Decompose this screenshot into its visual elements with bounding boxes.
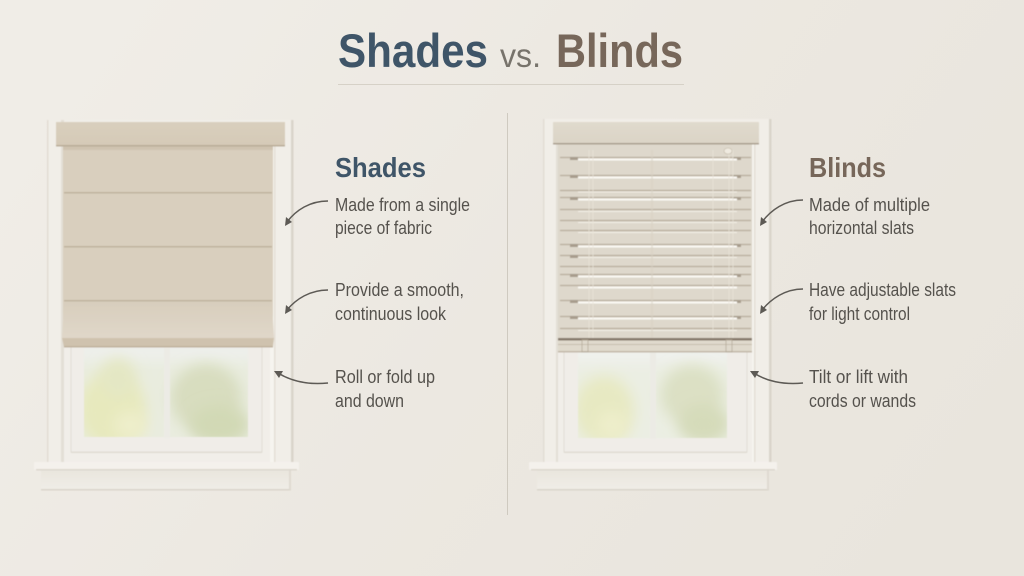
blinds bottom rail xyxy=(558,338,752,352)
window casing xyxy=(47,120,294,464)
callout: roll or fold: and down xyxy=(335,391,404,411)
callout: multiple slats xyxy=(809,195,930,238)
panel: shades text xyxy=(274,152,470,411)
callout: smooth look xyxy=(335,280,464,324)
shade valance xyxy=(56,122,285,146)
arrow xyxy=(750,371,803,384)
window frame and glass xyxy=(70,348,262,453)
callout: multiple slats: Made of multiple xyxy=(809,195,930,215)
arrow xyxy=(760,289,803,314)
title: Shades xyxy=(338,24,488,77)
callout: single piece of fabric xyxy=(335,195,470,238)
arrow xyxy=(285,290,328,314)
callout: adjustable slats xyxy=(809,280,956,324)
panel: shades window xyxy=(34,120,299,490)
window casing xyxy=(543,119,772,464)
title: Blinds xyxy=(556,24,683,77)
window sill xyxy=(34,462,299,490)
callout: smooth look: continuous look xyxy=(335,304,447,324)
horizontal blind slats xyxy=(558,144,752,344)
panel: blinds window xyxy=(529,119,777,490)
heading: blinds: Blinds xyxy=(809,152,886,183)
title: vs. xyxy=(500,37,541,74)
callout: smooth look: Provide a smooth, xyxy=(335,280,464,300)
window sill xyxy=(529,462,777,490)
callout: roll or fold: Roll or fold up xyxy=(335,367,435,387)
arrow xyxy=(285,201,328,226)
callout: single piece of fabric: Made from a single xyxy=(335,195,470,215)
callout: tilt or lift xyxy=(809,367,916,411)
callout: adjustable slats: Have adjustable slats xyxy=(809,280,956,300)
callout: tilt or lift: cords or wands xyxy=(809,391,916,411)
blinds valance xyxy=(553,122,759,144)
window frame and glass xyxy=(558,352,748,462)
callout: roll or fold xyxy=(335,367,435,411)
title xyxy=(338,24,683,77)
roman shade fabric xyxy=(62,146,274,348)
callout: adjustable slats: for light control xyxy=(809,304,910,324)
callout: multiple slats: horizontal slats xyxy=(809,218,914,238)
arrow xyxy=(274,371,328,384)
panel: blinds text xyxy=(750,152,956,411)
callout: single piece of fabric: piece of fabric xyxy=(335,218,432,238)
heading: shades: Shades xyxy=(335,152,426,183)
callout: tilt or lift: Tilt or lift with xyxy=(809,367,908,387)
arrow xyxy=(760,200,803,226)
